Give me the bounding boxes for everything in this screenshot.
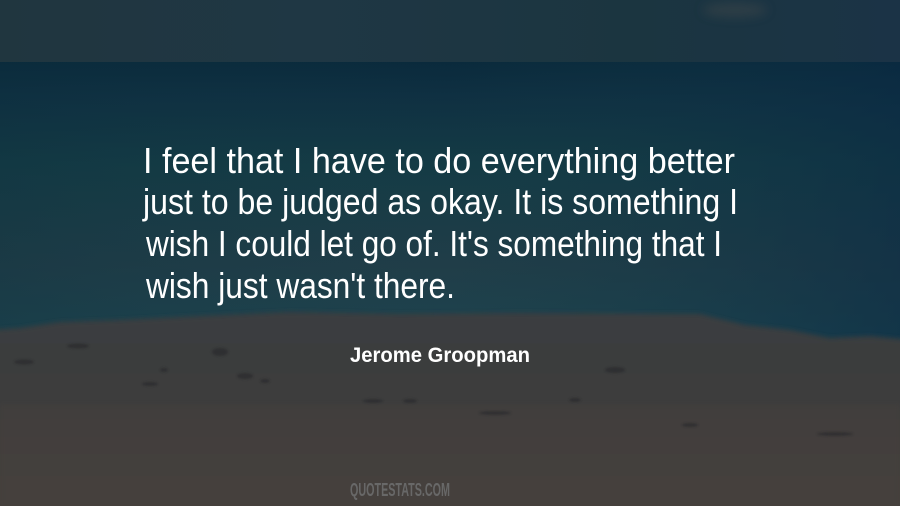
watermark: QUOTESTATS.COM (350, 480, 450, 500)
author name: Jerome Groopman (350, 344, 530, 367)
quote text: just to be judged as okay. It is something I (142, 181, 738, 222)
quote text (142, 140, 738, 306)
background: dark marks in the sand (14, 344, 853, 436)
quote text: wish I could let go of. It's something that I (145, 223, 722, 264)
background: beach sand (0, 312, 900, 506)
background: sky (0, 0, 900, 62)
background: sea (0, 62, 900, 352)
quote text: wish just wasn't there. (145, 265, 455, 306)
quote text: I feel that I have to do everything better (143, 140, 735, 181)
